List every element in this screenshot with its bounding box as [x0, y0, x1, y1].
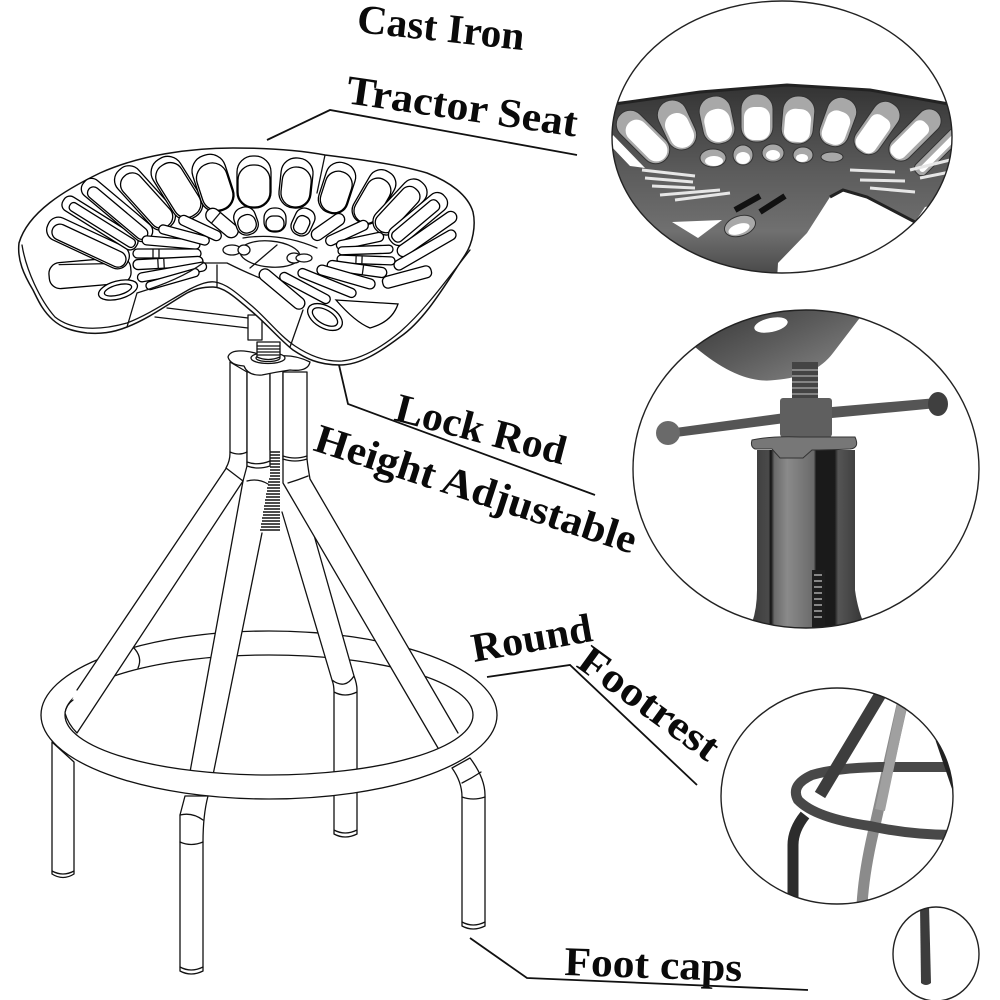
rear left foot: [52, 742, 74, 878]
photo circle outline: lock rod: [633, 310, 979, 628]
label: Height Adjustable: Height Adjustable: [309, 415, 643, 562]
four upper column tubes: [226, 362, 308, 484]
screw slot: [812, 570, 816, 628]
photo circle: cast iron tractor seat detail: [600, 85, 964, 280]
photo circle outline: seat: [612, 1, 952, 273]
front centre leg: [180, 450, 270, 974]
foot rod: [920, 905, 931, 985]
bottom-left foot tube: [793, 815, 805, 900]
rear right support leg: [283, 458, 485, 929]
rear right leg: [282, 512, 357, 837]
seat inner rim line: [22, 245, 470, 361]
mounting plate and nut: [228, 342, 310, 375]
far side tube: [938, 740, 955, 790]
column tubes and flare: [750, 450, 866, 628]
top plate: [751, 437, 857, 458]
label: Tractor Seat: Tractor Seat: [344, 66, 581, 146]
lever bar under the seat: [155, 308, 262, 340]
tractor seat: [19, 148, 474, 365]
label: Footrest: Footrest: [570, 636, 730, 770]
lock rod bar: [656, 392, 948, 445]
photo circle: lock rod and height adjustment detail: [656, 300, 948, 628]
seat casting: [612, 86, 951, 272]
label: Round: Round: [468, 604, 596, 671]
photo circle: round footrest detail: [793, 695, 955, 905]
seat slots, inner ring: [133, 204, 395, 312]
footrest ring, rear half: [41, 631, 497, 715]
photo circle: foot cap detail: [920, 905, 931, 985]
leader line: lock rod: [339, 365, 595, 495]
rear leg tube: [820, 695, 880, 795]
footrest ring, front band: [41, 715, 497, 799]
ring weld seam: [133, 647, 140, 668]
front left leg: [65, 467, 243, 733]
nut collar: [780, 398, 832, 437]
photo seat slots: [610, 93, 964, 240]
leader line: tractor seat: [267, 110, 577, 155]
seat slots, outer ring: [43, 150, 459, 336]
seat centre emblem: [127, 155, 325, 347]
threaded screw: [260, 450, 280, 532]
label: Foot caps: Foot caps: [564, 938, 743, 990]
photo seat fins: [642, 160, 950, 200]
leader line: round footrest: [487, 665, 697, 785]
seat outline: [19, 148, 474, 365]
footrest ring: [796, 767, 955, 835]
photo circle outline: footrest: [721, 688, 953, 904]
leader line: foot caps: [470, 938, 808, 990]
front leg over rear ring: [880, 705, 902, 810]
label: Lock Rod: Lock Rod: [391, 384, 572, 473]
stool line drawing: [19, 148, 497, 974]
photo circle outline: foot cap: [893, 907, 979, 1000]
threaded stem: [792, 362, 818, 400]
front leg tube: [862, 705, 902, 905]
seat underside: [696, 310, 860, 381]
